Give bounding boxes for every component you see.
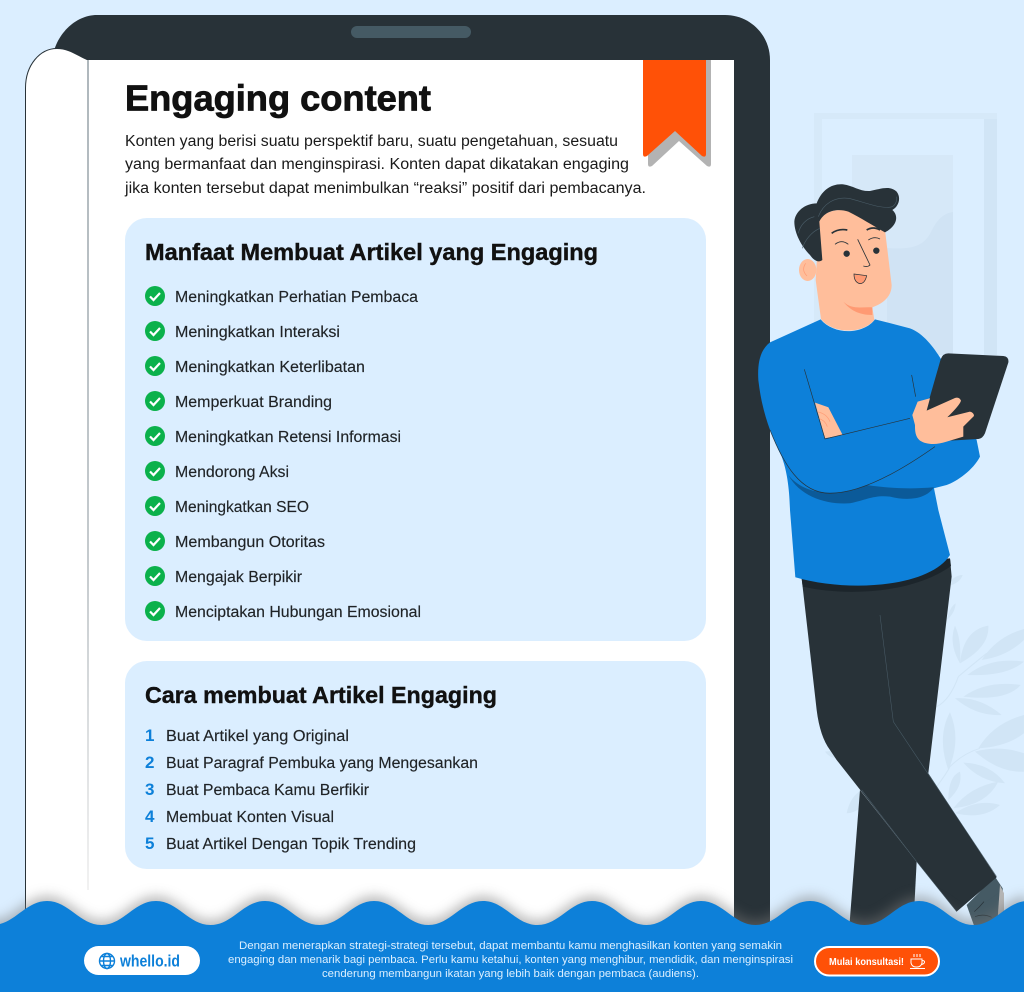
numbered list: steps: 1 (145, 726, 154, 745)
intro paragraph: jika konten tersebut dapat menimbulkan “reaksi” positif dari pembacanya. (124, 180, 646, 197)
checklist: benefits: Menciptakan Hubungan Emosional (175, 604, 421, 621)
panel: how to create engaging articles (125, 661, 706, 869)
numbered list: steps: Membuat Konten Visual (166, 809, 334, 826)
footer text: cenderung membangun ikatan yang lebih baik dengan pembaca (audiens). (322, 968, 699, 980)
checklist: benefits: Mendorong Aksi (175, 464, 289, 481)
intro paragraph (124, 133, 646, 197)
footer wave band (0, 901, 1024, 992)
checklist: benefits: Meningkatkan SEO (175, 499, 309, 516)
icon: coffee cup (910, 954, 925, 968)
numbered list: steps: 3 (145, 780, 154, 799)
numbered list: steps: Buat Artikel Dengan Topik Trending (166, 836, 416, 853)
numbered list: steps: Buat Artikel yang Original (166, 728, 349, 745)
sweater and arms (758, 319, 980, 586)
footer text (228, 940, 793, 980)
checklist: benefits: Meningkatkan Retensi Informasi (175, 429, 401, 446)
checklist: benefits: Membangun Otoritas (175, 534, 325, 551)
main white page (88, 60, 734, 940)
background window decoration (814, 113, 997, 359)
footer text: engaging dan menarik bagi pembaca. Perlu kamu ketahui, konten yang menghibur, mendidik, dan menginspirasi (228, 954, 793, 966)
checklist: benefits (145, 286, 421, 621)
panel heading: how to: Cara membuat Artikel Engaging (145, 682, 497, 708)
tablet and hand (912, 353, 1008, 444)
tablet device frame (52, 15, 770, 940)
website badge (84, 946, 200, 975)
left curled page (26, 48, 88, 940)
title: Engaging content (125, 78, 431, 118)
website name: whello.id (119, 952, 180, 970)
intro paragraph: yang bermanfaat dan menginspirasi. Konten dapat dikatakan engaging (125, 156, 629, 173)
checklist: benefits: Meningkatkan Keterlibatan (175, 359, 365, 376)
intro paragraph: Konten yang berisi suatu perspektif baru, suatu pengetahuan, sesuatu (125, 133, 618, 150)
illustration: man holding a tablet (758, 184, 1008, 928)
footer wave shadow (0, 896, 1024, 992)
icon: globe (100, 954, 114, 968)
background plant leaves (825, 575, 1024, 815)
numbered list: steps: Buat Pembaca Kamu Berfikir (166, 782, 369, 799)
checklist: benefits: Memperkuat Branding (175, 394, 332, 411)
panel heading: benefits: Manfaat Membuat Artikel yang Engaging (145, 239, 598, 265)
legs and shoe (802, 558, 1004, 928)
call-to-action button (815, 947, 939, 976)
panel: benefits of engaging articles (125, 218, 706, 641)
head and hair (794, 184, 899, 331)
checklist: benefits: Meningkatkan Perhatian Pembaca (175, 289, 418, 306)
checklist: benefits: Meningkatkan Interaksi (175, 324, 340, 341)
numbered list: steps: 2 (145, 753, 154, 772)
numbered list: steps: 4 (145, 807, 155, 826)
checklist: benefits: Mengajak Berpikir (175, 569, 302, 586)
numbered list: steps: 5 (145, 834, 154, 853)
tablet speaker pill (351, 26, 471, 38)
button label: Mulai konsultasi! (829, 957, 904, 968)
numbered list: steps: Buat Paragraf Pembuka yang Mengesankan (166, 755, 478, 772)
footer text: Dengan menerapkan strategi-strategi tersebut, dapat membantu kamu menghasilkan konten yang semakin (239, 940, 782, 952)
bookmark ribbon (643, 60, 711, 167)
numbered list: steps (145, 726, 478, 853)
